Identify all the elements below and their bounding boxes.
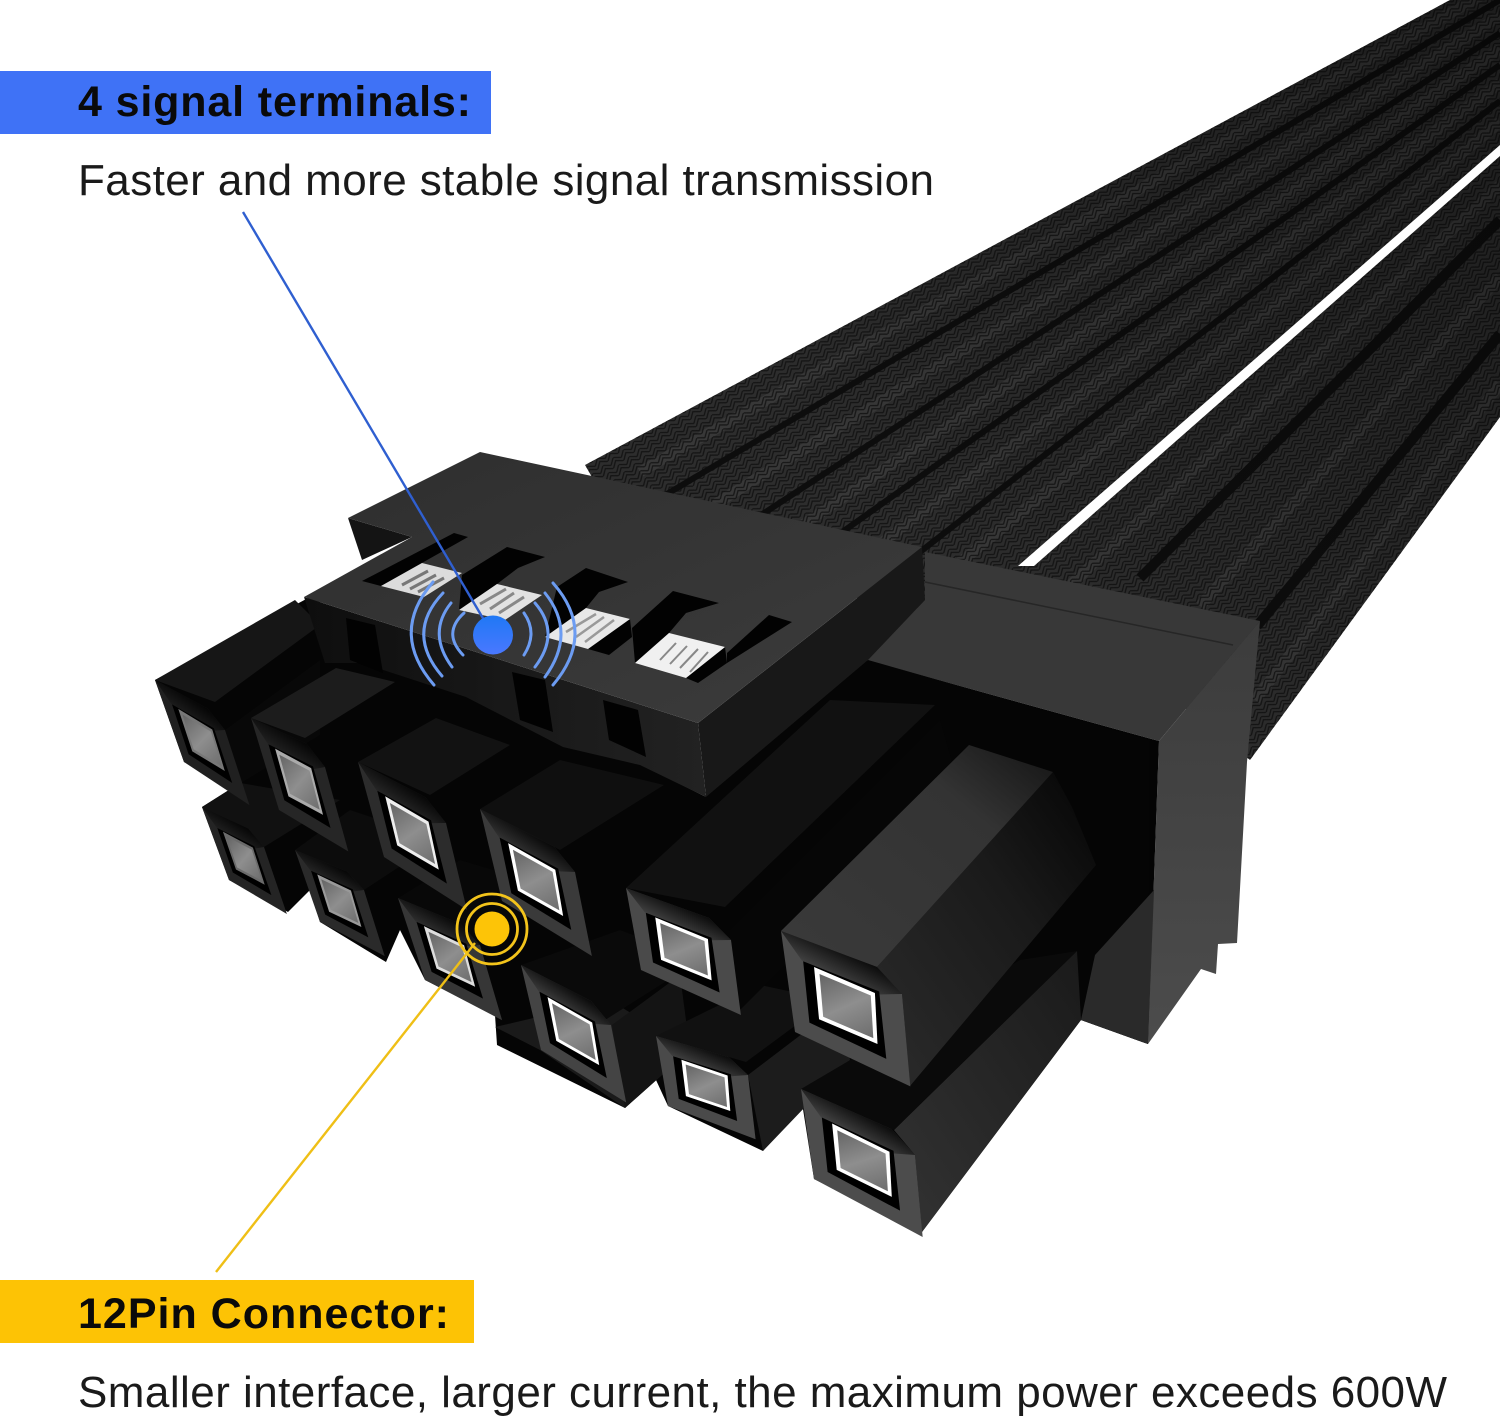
callout: yellow leader line xyxy=(216,943,475,1272)
pin: upper 4 xyxy=(477,760,664,964)
text block: connector description: Smaller interface, larger current, the maximum power exceeds 600W xyxy=(78,1368,1447,1417)
pin: upper 1 xyxy=(151,600,320,812)
pin: lower 1 xyxy=(198,783,340,920)
panel: lower row of pins xyxy=(198,783,1081,1245)
icon: terminal 2 xyxy=(459,584,542,620)
icon: terminal 4 xyxy=(635,633,725,678)
panel: pin cluster silhouette xyxy=(155,597,1150,1232)
slots xyxy=(362,533,792,683)
front notches xyxy=(346,618,646,757)
pin: lower 3 xyxy=(394,860,560,1027)
panel: upper row of pins xyxy=(151,600,1096,1095)
icon: terminal 1 xyxy=(381,563,462,597)
heading: 4 signal terminals xyxy=(0,71,491,134)
heading: 12Pin Connector xyxy=(0,1280,474,1343)
panel: braided cable bundle xyxy=(560,0,1500,780)
panel: connector housing xyxy=(700,552,1260,1044)
callout: blue leader line xyxy=(243,212,484,620)
pin: upper 2 xyxy=(247,668,395,859)
icon: blue dot xyxy=(473,616,513,654)
heading: 4 signal terminals: 4 signal terminals: xyxy=(78,78,471,126)
white gap between cables xyxy=(1018,145,1500,566)
icon: blue signal waves xyxy=(411,582,575,685)
icon: yellow target xyxy=(457,894,527,964)
pin: lower 4 xyxy=(495,930,700,1110)
pin: lower 2 xyxy=(291,810,440,962)
heading: 12Pin Connector: 12Pin Connector: xyxy=(78,1290,449,1338)
pin: lower 5 xyxy=(654,985,850,1151)
text block: signal description: Faster and more stable signal transmission xyxy=(78,156,934,205)
icon: terminal 3 xyxy=(545,608,630,649)
pin: lower 6 xyxy=(799,951,1081,1245)
pin: upper 6 xyxy=(779,745,1096,1095)
panel: housing lower front face xyxy=(1081,890,1154,1044)
pin: upper 5 xyxy=(624,700,960,1022)
panel: signal terminal plate xyxy=(304,452,925,797)
pin: upper 3 xyxy=(354,718,510,918)
